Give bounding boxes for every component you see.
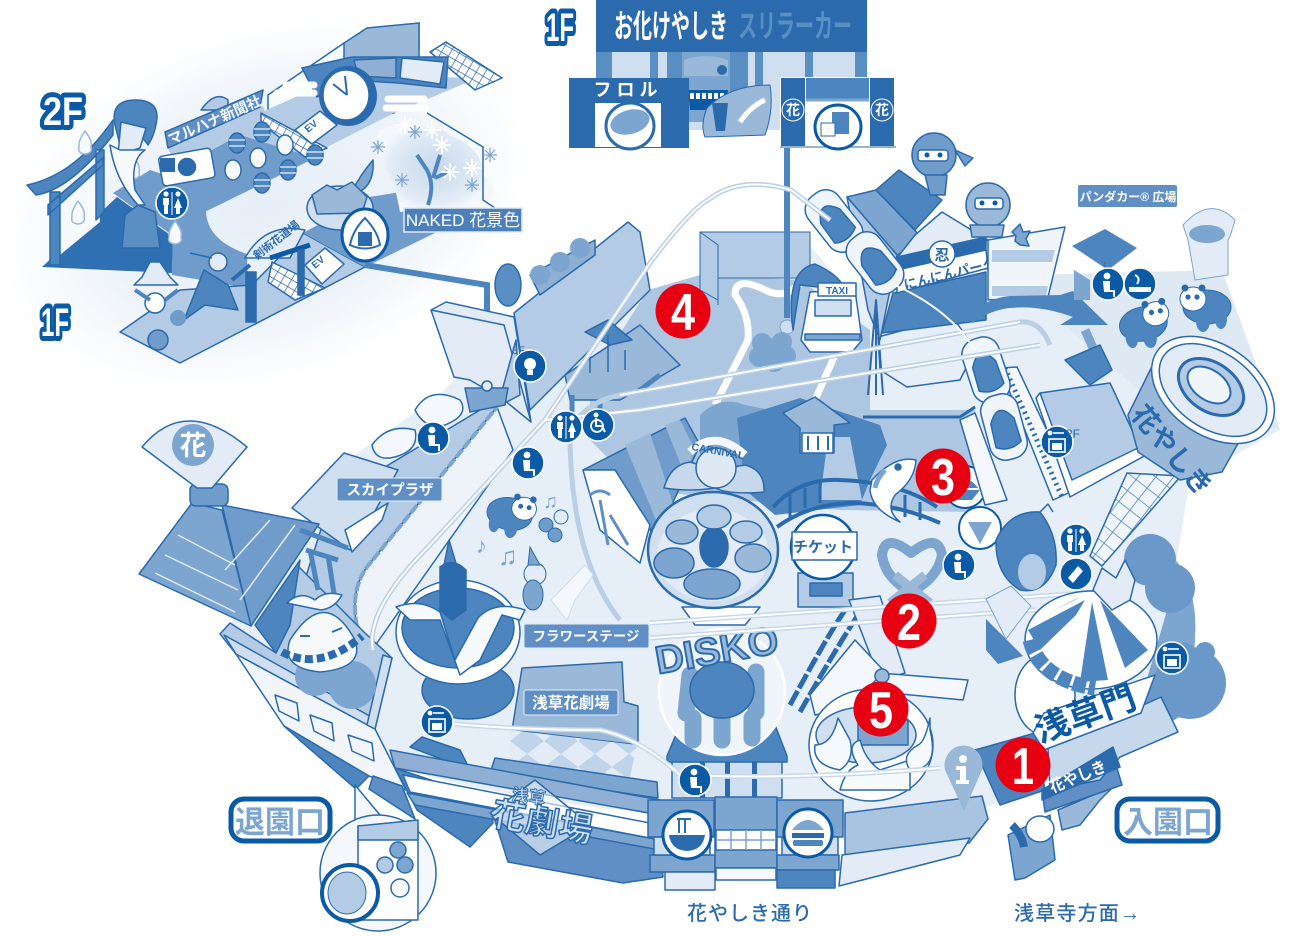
planter (530, 240, 595, 295)
haunted house header: お化けやしき (614, 8, 728, 44)
haunted house header: スリラーカー (738, 8, 852, 44)
ramen shop mid (654, 837, 710, 855)
theatre roof block 2 (490, 758, 658, 798)
floor label 2F: 2F (43, 90, 83, 134)
central tree mass (700, 398, 887, 515)
circus tent (1015, 560, 1157, 735)
label theatre (524, 690, 618, 715)
cafe chair (1074, 270, 1090, 300)
deck fence band (224, 635, 375, 729)
torii gate (27, 120, 113, 265)
planter flowers (530, 238, 590, 285)
marker 1 (996, 738, 1050, 796)
gift shop: 花 (786, 102, 800, 118)
blossom wall (427, 113, 495, 208)
deck right fence (367, 655, 392, 729)
ticket booth (791, 515, 857, 607)
icon: gift (815, 105, 861, 149)
torii white panel (60, 168, 100, 255)
support poles (868, 300, 883, 395)
theatre name small: 浅草 (510, 785, 547, 809)
dark sign band (897, 237, 986, 285)
icon: bottle (1060, 558, 1092, 590)
koi fish (870, 459, 916, 522)
wall base (596, 52, 867, 130)
ramen shop base (665, 872, 715, 890)
direction label: 浅草寺方面→ (1014, 902, 1140, 925)
gift shop (780, 77, 896, 147)
track structure right (863, 317, 1146, 505)
fan (142, 421, 247, 488)
umbrella (1072, 229, 1137, 280)
marker 4: 4 (671, 284, 695, 342)
burger shop (777, 800, 843, 888)
icon: restroom 2F (156, 187, 188, 219)
samurai (184, 253, 250, 320)
icon: onigiri (342, 209, 388, 261)
gate base (1042, 765, 1122, 812)
roof hip (190, 484, 228, 506)
long rail highlight (372, 184, 1040, 650)
long coaster rails (372, 184, 1050, 650)
pole ball (780, 320, 794, 334)
street label: 花やしき通り (687, 902, 813, 925)
sky plaza building (292, 453, 398, 550)
marker 2 (882, 594, 936, 652)
taxi: TAXI (826, 286, 848, 297)
east shops lower (839, 838, 970, 886)
dark roof corner (975, 733, 1045, 805)
icon: smoking (1124, 268, 1156, 300)
roof right face (222, 505, 319, 626)
upper floor light (262, 75, 478, 180)
east shops upper (845, 796, 988, 860)
marker 5 (854, 682, 908, 740)
plaza label: パンダカー® 広場 (1080, 189, 1176, 204)
icon: seat sky 2 (512, 447, 544, 479)
sky plaza wing (292, 340, 520, 650)
panel: castle roof tower (139, 421, 415, 819)
back wall of lantern area (168, 106, 270, 175)
windmill (810, 596, 968, 715)
monster face (682, 52, 730, 122)
music note 1: ♪ (476, 533, 487, 558)
icon: bulb 3F: 3F (512, 345, 525, 357)
tiled roof (876, 170, 942, 230)
marker 1: 1 (1012, 738, 1034, 796)
check building (988, 227, 1065, 300)
pale side strip (355, 407, 513, 650)
icon: bouquet (959, 507, 1001, 549)
plaza roof surface (300, 340, 520, 627)
cafe chairs (590, 335, 625, 373)
icon: burger (784, 809, 832, 857)
tile floor right (430, 42, 502, 90)
film frame left (354, 58, 396, 78)
label NAKED: NAKED 花景色 (406, 211, 520, 230)
tent crown (1093, 560, 1135, 610)
panel: front theatre row (390, 733, 1045, 890)
front rail highlight (455, 592, 1100, 776)
right rail track (1000, 367, 1075, 500)
clock (319, 66, 377, 126)
plaza label (1078, 185, 1177, 207)
roof left face (139, 503, 251, 626)
hanging lanterns (225, 122, 323, 193)
shuriken (1012, 224, 1030, 246)
panel: ninja park (799, 133, 1065, 395)
camera (158, 148, 216, 186)
carnival tent (583, 418, 700, 563)
connector line inset to building (365, 265, 487, 384)
EV label lower: EV (310, 254, 327, 271)
plaza props: panda and clown (476, 489, 593, 620)
carousel white top (396, 603, 525, 675)
theatre name plate (490, 780, 590, 855)
lattice tower (1090, 473, 1181, 566)
icon: bulb 3F (512, 345, 546, 382)
hanayashiki shop sign (1042, 747, 1120, 800)
frog ride (996, 504, 1056, 591)
tower ring (1131, 314, 1295, 466)
theatre yard (510, 662, 638, 777)
middle shop (715, 797, 777, 880)
panda car 2 (1180, 284, 1231, 332)
ring body (1128, 350, 1240, 480)
dark lower facade west (284, 726, 369, 789)
support pole (784, 148, 790, 318)
icon: locker 2F (1041, 426, 1080, 458)
ticket booth: チケット (793, 539, 853, 556)
mid rail (650, 592, 1100, 638)
panel: top 1F shop strip (569, 0, 896, 149)
theatre lower bar (407, 793, 660, 850)
EV sign lower (305, 248, 344, 284)
rear wall (700, 232, 810, 305)
panel: panda car plaza (1072, 185, 1235, 353)
icon: seat sky 1 (417, 422, 449, 454)
gacha bubble (320, 785, 436, 931)
roof lines (155, 520, 295, 612)
torii flames (72, 131, 181, 244)
lower rail (455, 724, 940, 776)
grey box building (1040, 383, 1140, 487)
left roof face (847, 190, 924, 255)
music note 3: ♫ (543, 491, 558, 513)
froru shop: フロル (594, 80, 662, 100)
panda (483, 489, 539, 542)
dojo gate (245, 217, 310, 322)
icon: seat plaza (1092, 268, 1124, 300)
disko ride (652, 619, 787, 798)
label flower stage: フラワーステージ (532, 629, 640, 644)
gacha machine (358, 820, 418, 920)
swan ride (809, 689, 933, 801)
coaster cars upper (799, 183, 910, 301)
ring inside (1142, 324, 1284, 456)
paper clouds (277, 85, 426, 108)
front rails (455, 592, 1100, 776)
background halo behind floor inset (0, 0, 576, 455)
newspaper sign: マルハナ新聞社 (166, 92, 264, 149)
disko-side wall (648, 800, 714, 837)
umbrella (585, 320, 632, 345)
theatre name: 花劇場 (489, 795, 596, 851)
carnival crown: CARNIVAL (690, 441, 746, 462)
2F dark floor (42, 197, 173, 273)
big arrow (967, 291, 1108, 325)
back wall upper (268, 23, 419, 130)
pale stage (878, 317, 975, 387)
flower carousel (396, 540, 525, 719)
crane game mascot (134, 262, 186, 350)
gate pillars (1058, 786, 1114, 830)
dark facade west 2 (369, 776, 415, 819)
label entrance: 入園口 (1123, 805, 1213, 840)
theatre right facade (490, 805, 663, 883)
ninja 1 (912, 133, 973, 195)
disko arms (686, 672, 756, 740)
theatre left facade (395, 768, 493, 847)
back wall panel (344, 23, 419, 60)
shrub (495, 264, 521, 306)
blossom flakes (371, 116, 497, 192)
music note 2: ♫ (498, 541, 518, 571)
heart monument (882, 543, 942, 603)
gift shop: 花 (875, 102, 889, 118)
info pin (944, 745, 982, 811)
icon: bread (606, 103, 654, 149)
dark tree mass (737, 398, 887, 515)
long rail lower (372, 345, 1040, 650)
marker 4 (656, 284, 710, 342)
plane ride (1065, 330, 1112, 385)
1F floor mid (303, 188, 435, 267)
haunted house header (596, 0, 867, 52)
icon: seat center (943, 549, 975, 581)
sky plaza label (337, 478, 442, 501)
white gable (897, 212, 988, 258)
sky plaza awning stripes (345, 503, 388, 552)
icon: restroom (550, 411, 582, 443)
panda car 1 (1116, 297, 1174, 353)
waterfall (820, 437, 862, 500)
trees right (1124, 534, 1226, 722)
tent carousel base (1015, 655, 1075, 735)
blossom cloud (378, 122, 494, 212)
central rear ground (590, 275, 975, 512)
icon: wheelchair (582, 409, 614, 441)
capsule (328, 872, 366, 914)
tent dome (1025, 591, 1157, 689)
terrace back (431, 222, 680, 422)
panel: hanayashiki tower (1090, 314, 1295, 566)
park base ground (225, 222, 1280, 830)
stairs tiles 1F (268, 262, 325, 300)
floor label top 1F: 1F (546, 6, 574, 50)
tower name: 花やしき (1125, 400, 1218, 502)
balcony ball (482, 381, 492, 391)
label exit: 退園口 (235, 805, 325, 840)
icon: restroom east (1060, 524, 1092, 556)
film strip (302, 57, 448, 97)
taxi (791, 264, 862, 352)
marker 3: 3 (931, 449, 955, 507)
bushes near whale (295, 656, 376, 709)
whale mascot (282, 593, 362, 672)
dojo gate: 剣術花道場 (250, 217, 302, 262)
asakusa gate (1030, 675, 1178, 830)
rail loop front (790, 610, 858, 712)
ramen shop lower (650, 855, 715, 872)
bench ride (986, 586, 1031, 664)
castle windows (275, 695, 374, 761)
spire (443, 540, 458, 570)
EV label upper: EV (303, 118, 320, 135)
fan: 花 (180, 431, 206, 461)
rice basket (307, 160, 373, 230)
cafe deck (565, 325, 680, 400)
floor label inset 1F: 1F (41, 301, 69, 345)
ninja sign: 忍 (934, 247, 950, 264)
fence strip (355, 407, 497, 627)
icon: ramen (663, 811, 711, 859)
left wall (847, 197, 897, 340)
rail ties (1005, 368, 1062, 497)
carousel bottom (422, 661, 514, 719)
tent stripes (1028, 597, 1148, 682)
castle wall (236, 654, 406, 790)
roof under (255, 560, 300, 653)
ring hole center (1181, 359, 1237, 411)
blossom tree (417, 155, 452, 205)
icon: locker east (1156, 642, 1188, 674)
gate awning (1048, 697, 1178, 790)
ring hole (1168, 347, 1254, 427)
disko hub (690, 662, 754, 718)
deck poles (572, 375, 660, 422)
carnival crown (664, 441, 764, 493)
right tree backing (1060, 527, 1195, 735)
torii (300, 530, 348, 600)
building white ledge (1036, 393, 1146, 497)
clown (523, 547, 546, 610)
bush behind taxi (749, 332, 796, 372)
icon: locker 2F: 2F (1066, 427, 1080, 441)
theatre roof block 1 (410, 737, 470, 770)
panel: floor inset 2F and 1F (27, 23, 502, 363)
film frame panda (400, 58, 444, 84)
icon: seat front (679, 764, 711, 796)
ghost woman (110, 100, 160, 248)
hanayashiki shop sign: 花やしき (1046, 757, 1109, 797)
label flower stage (524, 624, 649, 648)
clouds benches (372, 394, 463, 458)
second track (960, 413, 1007, 505)
label theatre: 浅草花劇場 (532, 693, 610, 712)
ninja storefront (882, 272, 986, 333)
icon: shaved ice (944, 466, 986, 508)
EV sign upper (295, 111, 337, 144)
ninja sign: にんにんパーク (902, 255, 997, 293)
building balcony (465, 388, 508, 412)
parfait cup (703, 85, 771, 137)
carousel deck (402, 588, 514, 668)
stairs tiles 2F (261, 113, 327, 157)
stage steps (551, 565, 593, 620)
balloons (539, 510, 568, 542)
marker 3 (916, 448, 970, 507)
2F floor mid (113, 135, 315, 235)
wall posts (596, 52, 867, 112)
mid fence rails (863, 407, 975, 417)
rail back curve (545, 184, 830, 420)
carnival ride (648, 441, 778, 625)
sky plaza label: スカイプラザ (346, 482, 434, 499)
fortune tower (1183, 209, 1235, 280)
carousel rim (396, 580, 520, 684)
marker 2: 2 (897, 594, 921, 652)
check stripe (992, 250, 1055, 296)
chimney edge (431, 310, 531, 422)
spire body (440, 563, 466, 620)
ninja 2 (966, 183, 1010, 237)
disko text: DISKO (652, 619, 782, 683)
capsule icon (322, 865, 378, 921)
panda plaza ground (1030, 270, 1280, 430)
arched bridge (773, 480, 940, 527)
1F floor light (120, 233, 365, 363)
theatre top band (390, 750, 660, 815)
theatre white band (403, 775, 660, 840)
long rail upper (570, 322, 1050, 620)
shrine (783, 397, 850, 453)
chimney building (431, 302, 531, 422)
pale tree lump (700, 402, 770, 490)
tent scallop band (1030, 640, 1095, 688)
connecting mid floor (172, 210, 248, 288)
gate sign: 浅草門 (1030, 679, 1141, 751)
coaster cars right (958, 333, 1031, 464)
froru shop (569, 78, 689, 148)
rooftop deck (220, 566, 392, 729)
ninja sign (897, 241, 997, 293)
icon: locker west (421, 706, 453, 738)
white road squiggle (715, 283, 835, 405)
panda mascot gate (1008, 815, 1055, 880)
marker 5: 5 (869, 682, 893, 740)
